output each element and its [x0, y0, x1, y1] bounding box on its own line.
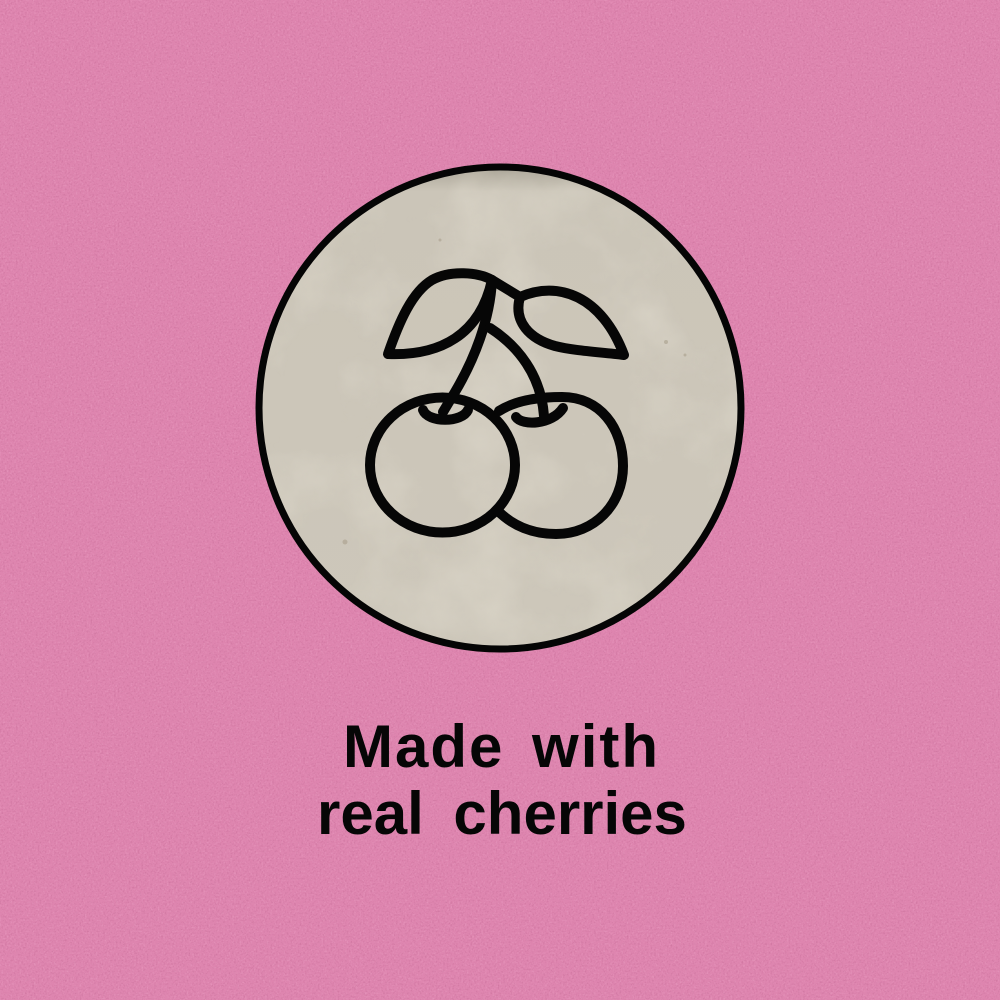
- left cherry: [370, 398, 515, 532]
- title: [317, 713, 687, 847]
- title line 1: Made with: [343, 713, 660, 780]
- title line 2: real cherries: [317, 780, 687, 847]
- stone flecks: [342, 238, 686, 544]
- right leaf: [492, 280, 624, 355]
- left leaf: [388, 273, 492, 354]
- right stem: [490, 328, 544, 416]
- stone badge circle: [255, 164, 745, 654]
- icon: cherries: [370, 273, 624, 534]
- left cherry stem dimple: [423, 410, 468, 420]
- right cherry: [498, 397, 623, 534]
- right cherry stem dimple: [516, 408, 563, 423]
- left stem: [443, 280, 492, 412]
